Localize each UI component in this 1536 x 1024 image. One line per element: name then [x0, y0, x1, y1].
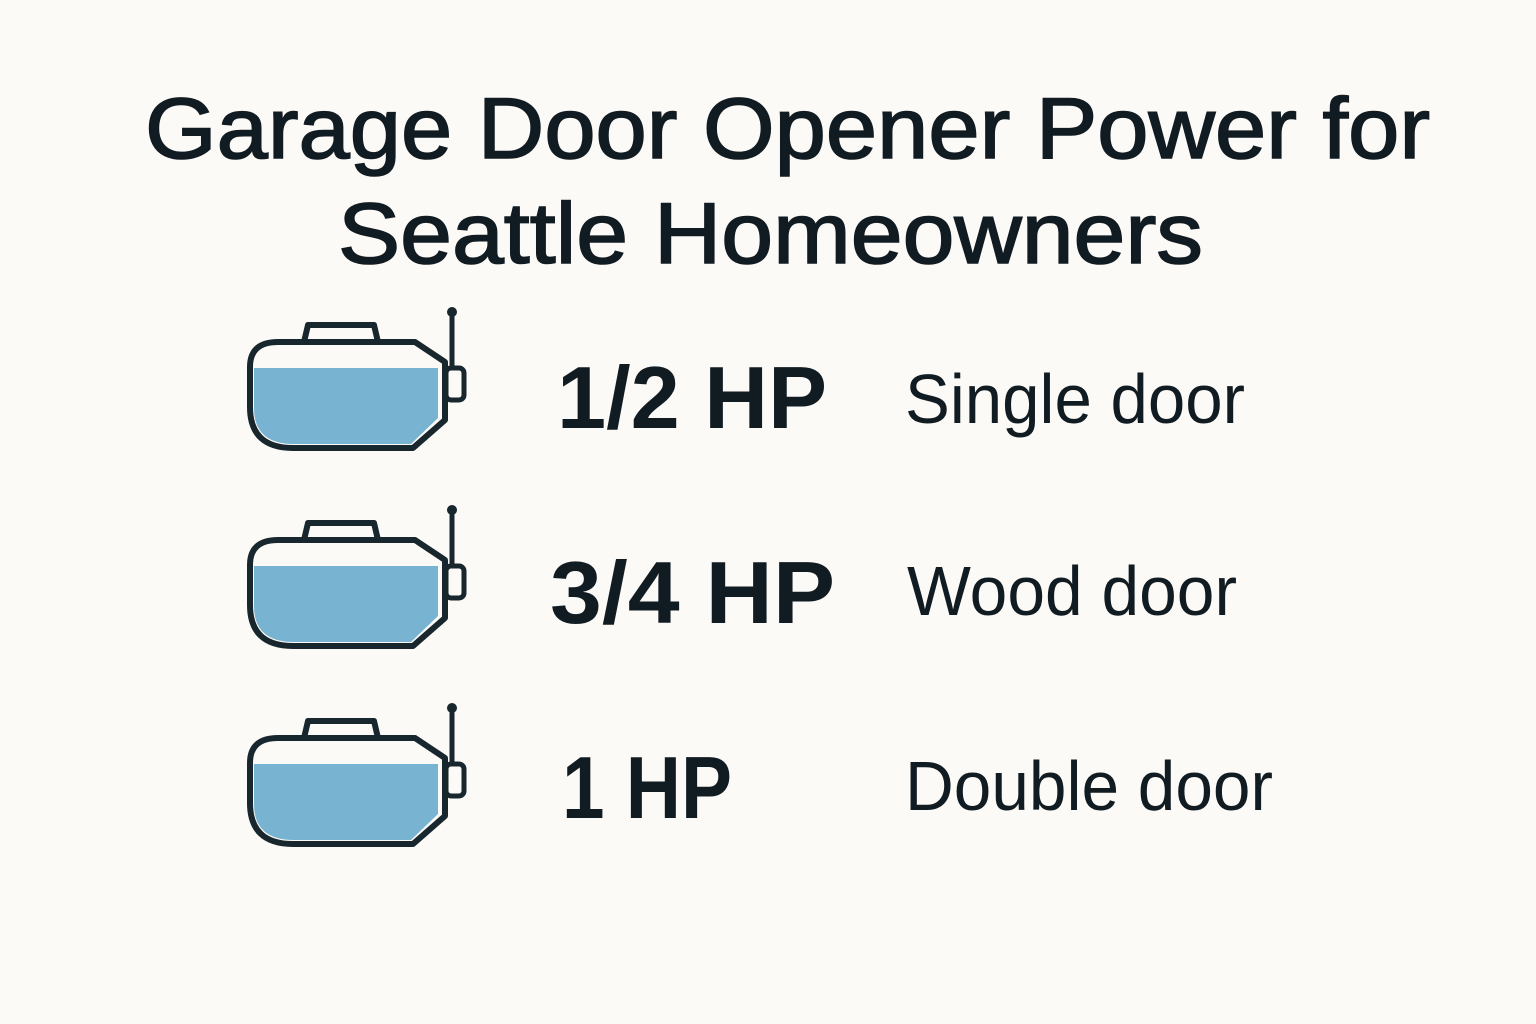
icon: opener 2 [250, 505, 464, 646]
title: Garage Door Opener Power for [145, 81, 1430, 177]
label: 1/2 HP: 1/2 HP [557, 348, 827, 447]
label: 1 HP: 1 HP [562, 738, 732, 837]
row: 1/2 HP single door [250, 307, 1245, 448]
icon: opener 1 [250, 307, 464, 448]
label: 3/4 HP: 3/4 HP [550, 543, 835, 642]
title [145, 81, 1430, 282]
icon: opener 3 [250, 703, 464, 844]
row: 3/4 HP wood door [250, 505, 1237, 646]
description: wood door: Wood door [907, 552, 1237, 630]
description: single door: Single door [905, 360, 1245, 438]
title: Seattle Homeowners [338, 186, 1203, 282]
row: 1 HP double door [250, 703, 1273, 844]
description: double door: Double door [905, 747, 1273, 825]
